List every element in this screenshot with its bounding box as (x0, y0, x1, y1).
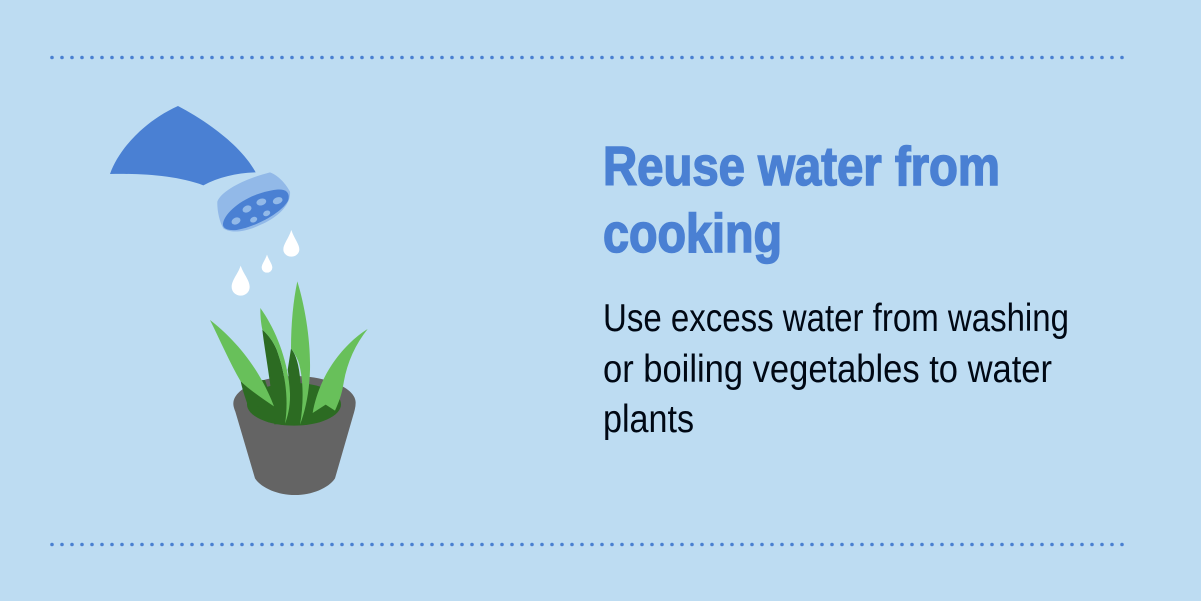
spout rose cap (217, 172, 290, 232)
icon: watering can spout (110, 106, 299, 296)
body text: plants (603, 398, 694, 441)
pot (233, 376, 356, 495)
soil and inner pot shadow (247, 383, 341, 426)
heading (603, 135, 1000, 264)
rose face with holes (223, 190, 289, 230)
heading: Reuse water from (603, 135, 1000, 197)
water drops (232, 230, 299, 296)
light leaves (210, 281, 368, 425)
body text (603, 297, 1069, 441)
body text: Use excess water from washing (603, 297, 1069, 340)
body text: or boiling vegetables to water (603, 348, 1052, 391)
dark leaves (241, 330, 301, 425)
icon: potted plant (210, 281, 368, 495)
heading: cooking (603, 202, 782, 264)
spout body (110, 106, 256, 185)
